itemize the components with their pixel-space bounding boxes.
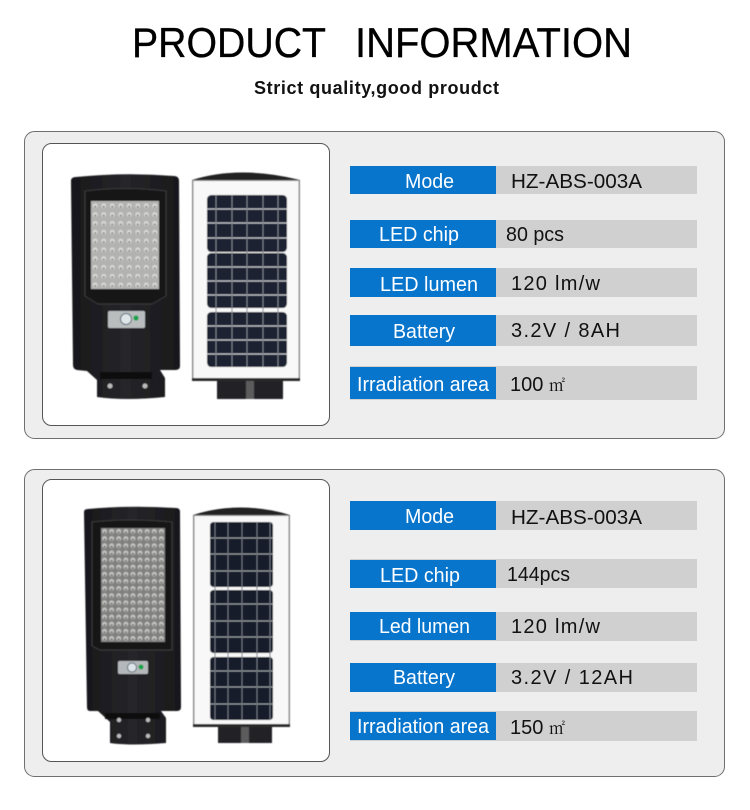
row: Battery: Battery — [393, 321, 455, 343]
panel: 144 LED model — [24, 470, 724, 776]
row: LED chip: LED chip — [380, 565, 460, 587]
row: Mode: Mode — [405, 506, 454, 528]
row: Battery — [350, 663, 697, 692]
row: LED chip — [350, 559, 697, 588]
row: LED lumen: 120 lm/w — [511, 273, 601, 295]
row: Mode — [350, 501, 697, 530]
lamp back view with solar panel — [193, 508, 290, 743]
row: LED lumen — [350, 268, 697, 297]
row: Mode: HZ-ABS-003A — [511, 507, 643, 529]
product photo card: 144 LED lamp — [42, 480, 330, 762]
row: Led lumen: 120 lm/w — [511, 616, 601, 638]
panel: 80 LED model — [24, 132, 724, 438]
row: LED chip: LED chip — [379, 224, 459, 246]
row: Led lumen: Led lumen — [379, 616, 470, 638]
row: Battery — [350, 315, 697, 346]
row: Irradiation area: 100 ㎡ — [510, 373, 565, 396]
row: LED lumen: LED lumen — [380, 274, 478, 296]
spec rows — [350, 501, 697, 741]
product photo card: 80 LED lamp — [42, 144, 330, 426]
row: Irradiation area: Irradiation area — [357, 716, 490, 738]
row: Irradiation area: 150 ㎡ — [510, 716, 565, 739]
lamp back view with solar panel — [192, 172, 300, 399]
spec rows — [350, 166, 697, 400]
row: Battery: 3.2V / 8AH — [511, 320, 620, 342]
lamp front view — [71, 174, 180, 399]
title — [132, 19, 632, 66]
lamp front view — [84, 507, 181, 744]
row: LED chip — [350, 220, 697, 248]
row: Led lumen — [350, 612, 697, 641]
subtitle: Strict quality,good proudct — [254, 78, 499, 98]
title: PRODUCT — [132, 19, 326, 66]
row: Battery: Battery — [393, 667, 455, 689]
row: Irradiation area — [350, 711, 697, 741]
title: INFORMATION — [355, 19, 632, 66]
row: Mode: HZ-ABS-003A — [511, 171, 643, 193]
row: LED chip: 144pcs — [507, 564, 570, 586]
row: Mode — [350, 166, 697, 194]
row: Irradiation area: Irradiation area — [357, 374, 490, 396]
row: Mode: Mode — [405, 171, 454, 193]
row: Battery: 3.2V / 12AH — [511, 667, 633, 689]
row: Irradiation area — [350, 366, 697, 400]
row: LED chip: 80 pcs — [506, 224, 564, 246]
